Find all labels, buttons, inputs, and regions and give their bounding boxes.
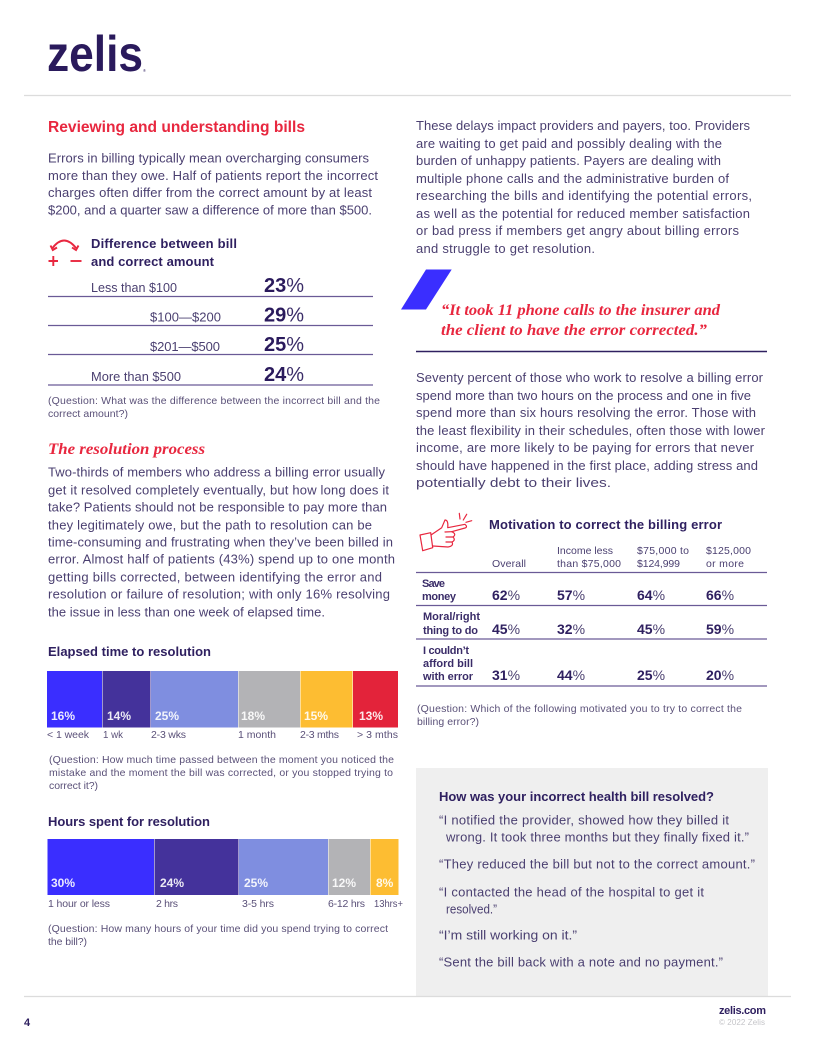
row: more than $500 (91, 364, 304, 386)
bar segment: 13% over 3 months (353, 671, 398, 741)
question note: motivation: billing error?) (417, 716, 479, 728)
question note: difference (48, 395, 380, 420)
bar segment: 18% 1 month (238, 671, 300, 741)
table row: could not afford bill (422, 645, 734, 683)
bar segment: 25% 3-5 hours: 25% (244, 876, 268, 890)
text block: resolution process: getting bills corrected, between identifying the error and (48, 570, 382, 584)
bar segment: 13% over 3 months: > 3 mths (357, 729, 398, 741)
text block: resolution process: the issue in less than one week of elapsed time. (48, 604, 325, 620)
footer: website and copyright: © 2022 Zelis (719, 1018, 765, 1027)
quote: sent the bill back: “Sent the bill back with a note and no payment.” (439, 954, 723, 970)
quote text: the client to have the error corrected.” (441, 322, 707, 339)
panel: motivation table (416, 513, 767, 728)
row: $100 to $200 (150, 305, 304, 327)
table row: save money: 62% (492, 587, 520, 603)
table row: save money: money (422, 591, 457, 603)
question note: difference: correct amount?) (48, 408, 128, 420)
bar segment: 13% over 3 months: 13% (359, 709, 383, 723)
bar segment: 24% 2 hours (154, 839, 238, 910)
quote text (441, 302, 720, 339)
row: less than $100 (91, 275, 304, 297)
table row: could not afford bill: 31% (492, 667, 520, 683)
text block: resolution process: error. Almost half of patients (43%) spend up to one month (48, 552, 395, 566)
panel: reviewing and understanding bills (48, 119, 378, 218)
text block: seventy percent: spend more than six hours resolving the error. Those with (416, 405, 756, 420)
text block: billing errors intro: $200, and a quarter saw a difference of more than $500. (48, 202, 372, 218)
table column headers: or more (706, 558, 744, 570)
question note: motivation (417, 703, 742, 728)
table column headers: than $75,000 (557, 558, 621, 570)
table row: could not afford bill: 20% (706, 667, 734, 683)
row: less than $100: Less than $100 (91, 280, 177, 295)
icon: pointing hand (420, 513, 472, 551)
quote: reduced the bill: “They reduced the bill but not to the correct amount.” (439, 856, 755, 872)
table row: moral right thing to do: Moral/right (423, 611, 480, 623)
bar segment: 24% 2 hours: 2 hrs (156, 898, 178, 910)
bar segment: 8% 13 hours plus: 13hrs+ (374, 898, 403, 910)
bar segment: 14% 1 week: 1 wk (103, 729, 124, 741)
text block: delays impact providers and payers: These delays impact providers and payers, too. Providers (416, 118, 750, 133)
table column headers: Overall (492, 558, 526, 570)
row: more than $500: More than $500 (91, 369, 181, 384)
chart: hours spent for resolution (48, 814, 403, 910)
icon: plus minus swap arrows (48, 240, 82, 266)
table row: save money: 64% (637, 587, 665, 603)
text block: seventy percent: Seventy percent of those who work to resolve a billing error (416, 370, 764, 385)
heading: hours spent: Hours spent for resolution (48, 814, 210, 829)
heading: motivation: Motivation to correct the billing error (489, 517, 722, 532)
footer: website and copyright: zelis.com (719, 1005, 766, 1017)
heading: difference table: Difference between bill (91, 236, 237, 251)
table row: save money (422, 578, 734, 603)
bar segment: 12% 6-12 hours: 12% (332, 876, 356, 890)
bar segment: 25% 2-3 weeks (151, 671, 238, 741)
table row: could not afford bill: with error (422, 671, 474, 683)
icon: blue parallelogram (401, 270, 452, 310)
text block: seventy percent: should have happened in the first place, adding stress and (416, 458, 758, 473)
quote: notified the provider: wrong. It took three months but they finally fixed it.” (445, 830, 749, 844)
heading: reviewing and understanding bills: Reviewing and understanding bills (48, 119, 305, 136)
text block: delays impact providers and payers: researching the bills and identifying the potential errors, (416, 188, 752, 203)
text block: resolution process: get it resolved completely eventually, but how long does it (48, 482, 389, 498)
text block: billing errors intro: more than they owe. Half of patients report the incorrect (48, 168, 378, 183)
heading: difference table: and correct amount (91, 254, 215, 269)
question note: hours spent (48, 923, 388, 948)
quote: contacted head of hospital: resolved.” (446, 902, 497, 916)
table row: moral right thing to do: 45% (637, 621, 665, 637)
table row: moral right thing to do: 32% (557, 621, 585, 637)
table row: could not afford bill: 44% (557, 667, 585, 683)
heading: how resolved: How was your incorrect health bill resolved? (439, 789, 714, 804)
text block: seventy percent: spend more than two hours on the process and one in five (416, 388, 751, 403)
quote: notified the provider (439, 812, 749, 844)
text block: delays impact providers and payers (416, 118, 752, 256)
bar segment: 25% 3-5 hours: 3-5 hrs (242, 898, 274, 910)
heading: difference table (91, 236, 237, 269)
question note: difference: (Question: What was the difference between the incorrect bill and the (48, 395, 380, 407)
footer: website and copyright (719, 1005, 766, 1027)
text block: billing errors intro (48, 150, 378, 218)
text block: seventy percent: income, are more likely to be paying for errors that never (416, 440, 755, 455)
panel: how was your incorrect health bill resolved (416, 768, 768, 996)
heading: elapsed time: Elapsed time to resolution (48, 644, 211, 659)
bar segment: 16% under 1 week: < 1 week (47, 729, 90, 741)
text block: delays impact providers and payers: are waiting to get paid and possibly dealing with the (416, 136, 722, 151)
question note: elapsed time (49, 754, 394, 792)
chart: elapsed time to resolution (47, 644, 398, 741)
bar segment: 30% 1 hour or less (48, 839, 154, 910)
bar segment: 15% 2-3 months: 2-3 mths (300, 729, 339, 741)
text block: billing errors intro: charges often differ from the correct amount by at least (48, 185, 372, 200)
table row: moral right thing to do: 45% (492, 621, 520, 637)
callout: phone calls quote (401, 270, 767, 352)
text block: seventy percent (416, 370, 766, 490)
row: $201 to $500: 25% (264, 334, 304, 356)
quote: contacted head of hospital: “I contacted the head of the hospital to get it (439, 884, 704, 900)
bar segment: 18% 1 month: 18% (241, 709, 265, 723)
question note: elapsed time: (Question: How much time passed between the moment you noticed the (49, 754, 394, 766)
table column headers: $124,999 (637, 558, 680, 570)
bar segment: 14% 1 week (102, 671, 150, 741)
bar segment: 8% 13 hours plus (370, 839, 403, 910)
text block: delays impact providers and payers: or bad press if members get angry about billing errors (416, 223, 740, 238)
text block: resolution process: Two-thirds of members who address a billing error usually (48, 464, 386, 480)
table row: could not afford bill: afford bill (423, 658, 473, 670)
logo: zelis: zelis (47, 26, 143, 82)
bar segment: 12% 6-12 hours (328, 839, 370, 910)
text block: resolution process: they legitimately owe, but the path to resolution can be (48, 518, 372, 532)
panel: the resolution process (48, 441, 395, 620)
row: less than $100: 23% (264, 275, 304, 297)
bar segment: 15% 2-3 months (300, 671, 352, 741)
question note: elapsed time: correct it?) (49, 780, 98, 792)
row: more than $500: 24% (264, 364, 304, 386)
quote: contacted head of hospital (439, 884, 704, 916)
row: $201 to $500: $201—$500 (150, 339, 220, 354)
text block: resolution process: resolution or failure of resolution; with only 16% resolving (48, 586, 390, 602)
bar segment: 14% 1 week: 14% (107, 709, 131, 723)
footer: page number: 4 (24, 1017, 31, 1029)
text block: delays impact providers and payers: multiple phone calls and the administrative burden of (416, 171, 729, 186)
quote text: “It took 11 phone calls to the insurer and (441, 302, 720, 319)
table row: moral right thing to do (423, 611, 734, 637)
text block: resolution process: time-consuming and frustrating when they’ve been billed in (48, 534, 393, 550)
bar segment: 25% 2-3 weeks: 2-3 wks (151, 729, 186, 741)
bar segment: 30% 1 hour or less: 1 hour or less (48, 898, 110, 910)
heading: the resolution process: The resolution process (48, 441, 205, 458)
table row: could not afford bill: I couldn’t (423, 645, 469, 657)
table row: moral right thing to do: thing to do (423, 625, 478, 637)
bar segment: 16% under 1 week (47, 671, 102, 741)
question note: hours spent: the bill?) (48, 936, 87, 948)
text block: billing errors intro: Errors in billing typically mean overcharging consumers (48, 150, 370, 166)
bar segment: 25% 2-3 weeks: 25% (155, 709, 179, 723)
table row: could not afford bill: 25% (637, 667, 665, 683)
table column headers: Income less (557, 545, 613, 557)
text block: seventy percent: the least flexibility in their schedules, often those with lower (416, 423, 766, 438)
text block: resolution process: take? Patients should not be responsible to pay more than (48, 500, 387, 514)
bar segment: 30% 1 hour or less: 30% (51, 876, 75, 890)
bar segment: 12% 6-12 hours: 6-12 hrs (328, 898, 365, 910)
text block: seventy percent: potentially debt to their lives. (416, 475, 611, 490)
quote: notified the provider: “I notified the provider, showed how they billed it (439, 812, 729, 828)
bar segment: 15% 2-3 months: 15% (304, 709, 328, 723)
panel: difference between bill and correct amount (48, 236, 380, 420)
text block: delays impact providers and payers: burden of unhappy patients. Payers are dealing with (416, 153, 721, 168)
row: $100 to $200: 29% (264, 305, 304, 327)
bar segment: 16% under 1 week: 16% (51, 709, 75, 723)
table row: save money: 66% (706, 587, 734, 603)
row: $100 to $200: $100—$200 (150, 310, 221, 325)
bar segment: 18% 1 month: 1 month (238, 729, 276, 741)
question note: motivation: (Question: Which of the following motivated you to try to correct the (417, 703, 742, 715)
table row: save money: 57% (557, 587, 585, 603)
table column headers: $75,000 to (637, 545, 689, 557)
quote: still working on it: “I’m still working on it.” (439, 928, 577, 942)
table column headers: $125,000 (706, 545, 751, 557)
bar segment: 25% 3-5 hours (239, 839, 328, 910)
question note: hours spent: (Question: How many hours of your time did you spend trying to correct (48, 923, 388, 935)
table row: moral right thing to do: 59% (706, 621, 734, 637)
text block: resolution process (48, 464, 395, 620)
text block: delays impact providers and payers: and struggle to get resolution. (416, 241, 595, 256)
row: $201 to $500 (150, 334, 304, 356)
bar segment: 8% 13 hours plus: 8% (376, 876, 394, 890)
table column headers (492, 545, 751, 570)
table row: save money: Save (422, 578, 445, 590)
logo: zelis: ® (143, 68, 146, 73)
bar segment: 24% 2 hours: 24% (160, 876, 184, 890)
text block: delays impact providers and payers: as well as the potential for reduced member satisfaction (416, 206, 750, 221)
question note: elapsed time: mistake and the moment the bill was corrected, or you stopped trying to (49, 767, 393, 779)
